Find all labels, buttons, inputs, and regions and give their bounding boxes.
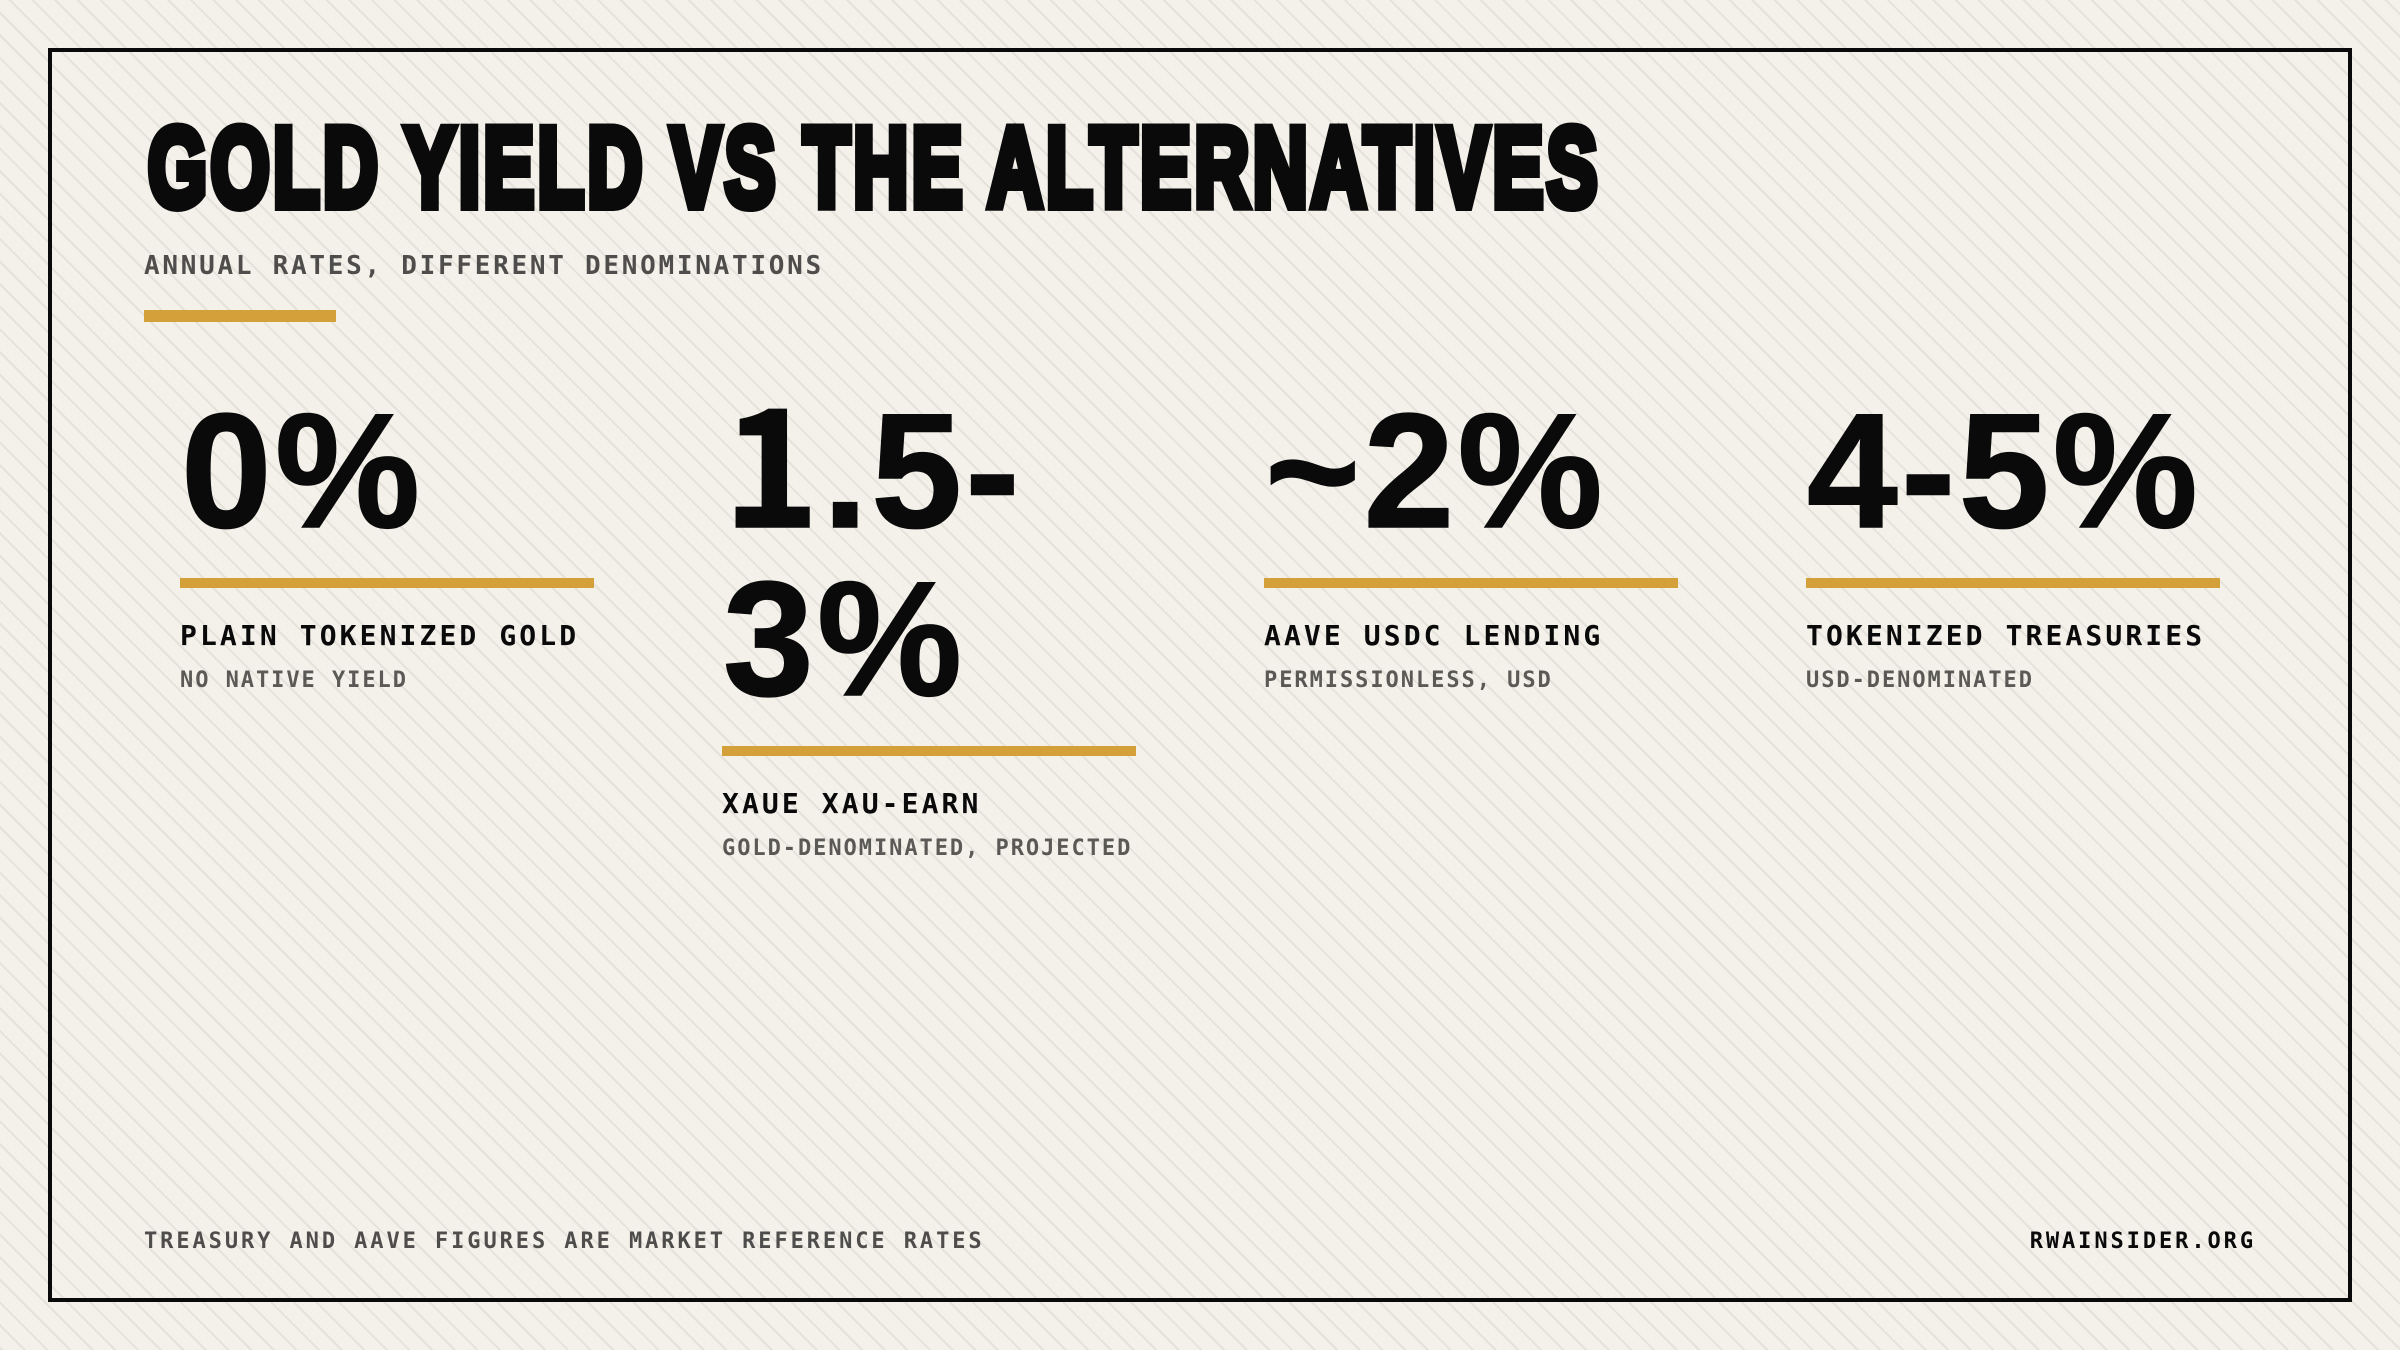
stat: tokenized treasuries xyxy=(1806,379,2220,693)
footnote: TREASURY AND AAVE FIGURES ARE MARKET REFERENCE RATES xyxy=(144,1229,985,1254)
stat: tokenized treasuries: USD-DENOMINATED xyxy=(1806,668,2034,693)
stat: tokenized treasuries: TOKENIZED TREASURIES xyxy=(1806,619,2205,652)
stat: plain tokenized gold: PLAIN TOKENIZED GOLD xyxy=(180,619,579,652)
stat: Aave USDC lending: PERMISSIONLESS, USD xyxy=(1264,668,1553,693)
stat: tokenized treasuries: 4-5% xyxy=(1807,379,2201,562)
stat: XAUE XAU-earn xyxy=(722,338,1136,861)
stat: XAUE XAU-earn: 1.5- xyxy=(723,338,1023,574)
source credit: RWAINSIDER.ORG xyxy=(2030,1229,2256,1254)
stat: XAUE XAU-earn: 3% xyxy=(723,547,965,730)
stat: Aave USDC lending xyxy=(1264,379,1678,693)
subtitle: ANNUAL RATES, DIFFERENT DENOMINATIONS xyxy=(144,251,824,281)
stat: XAUE XAU-earn: GOLD-DENOMINATED, PROJECTED xyxy=(722,836,1132,861)
stat: Aave USDC lending: ~2% xyxy=(1265,379,1606,562)
stat: plain tokenized gold: NO NATIVE YIELD xyxy=(180,668,408,693)
accent rule xyxy=(144,310,336,322)
stat: Aave USDC lending: AAVE USDC LENDING xyxy=(1264,619,1603,652)
stat: plain tokenized gold xyxy=(180,379,594,693)
title: GOLD YIELD VS THE ALTERNATIVES xyxy=(148,105,1601,230)
stat: XAUE XAU-earn: XAUE XAU-EARN xyxy=(722,787,981,820)
stat: plain tokenized gold: 0% xyxy=(181,379,423,562)
